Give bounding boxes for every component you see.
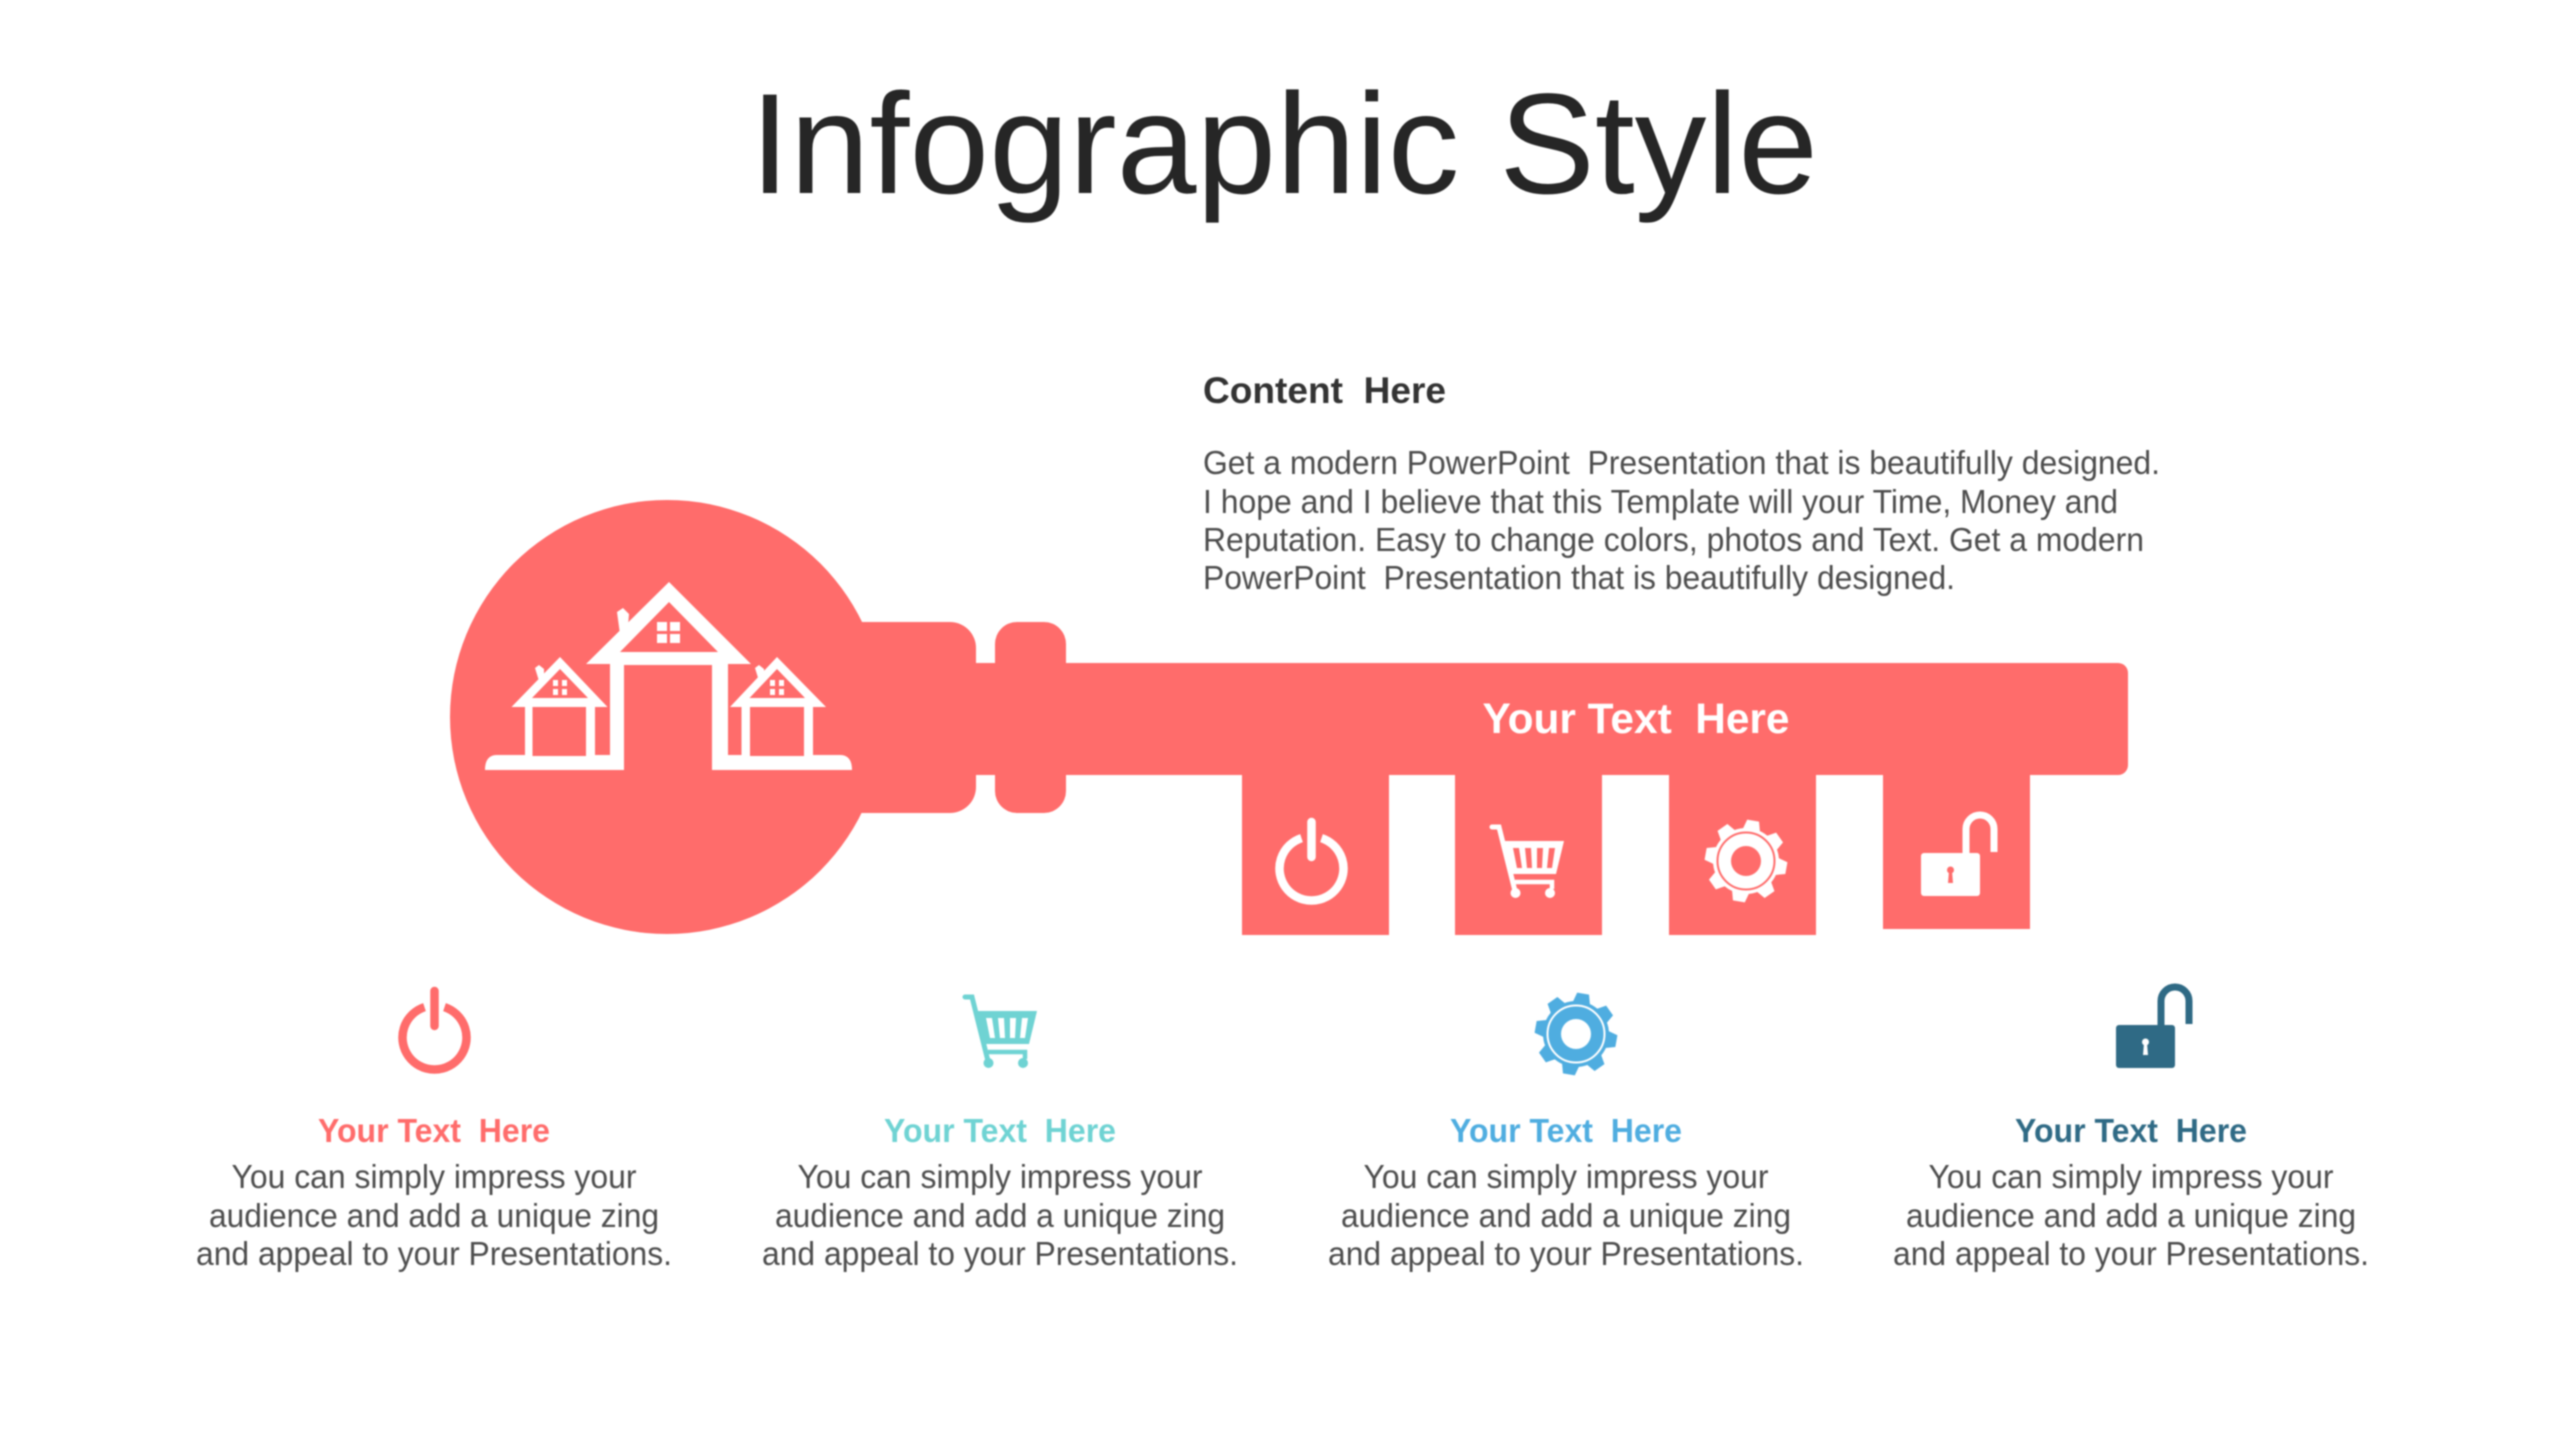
body text: You can simply impress your — [232, 1158, 636, 1195]
content paragraph — [1203, 444, 2160, 596]
key graphic — [450, 500, 2128, 935]
body text: audience and add a unique zing — [209, 1197, 659, 1234]
body text: and appeal to your Presentations. — [1328, 1235, 1804, 1272]
heading: Your Text Here — [884, 1112, 1116, 1149]
icon: gear — [1534, 992, 1618, 1076]
icon: cart on key — [1492, 827, 1564, 898]
heading: Your Text Here — [1450, 1112, 1682, 1149]
body text — [196, 1158, 672, 1272]
body text: You can simply impress your — [1928, 1158, 2334, 1195]
icon: cart — [965, 997, 1037, 1068]
body text — [1893, 1158, 2369, 1272]
body text: and appeal to your Presentations. — [762, 1235, 1238, 1272]
text block: content — [1203, 370, 2160, 596]
body text: audience and add a unique zing — [1906, 1197, 2356, 1234]
body text: You can simply impress your — [1364, 1158, 1768, 1195]
icon: gear on key — [1704, 819, 1788, 903]
icon: power — [402, 991, 466, 1069]
content heading: Content Here — [1203, 370, 1446, 411]
body text: and appeal to your Presentations. — [1893, 1235, 2369, 1272]
icon: houses — [485, 582, 852, 770]
body text: audience and add a unique zing — [1341, 1197, 1791, 1234]
body text: audience and add a unique zing — [775, 1197, 1225, 1234]
content paragraph: PowerPoint Presentation that is beautifully designed. — [1203, 559, 1955, 596]
key label: Your Text Here — [1482, 695, 1790, 743]
column: cart — [762, 997, 1238, 1272]
body text: You can simply impress your — [798, 1158, 1202, 1195]
key silhouette — [450, 500, 2128, 935]
icon: padlock — [2116, 987, 2189, 1068]
column: gear — [1328, 992, 1804, 1272]
column: padlock — [1893, 987, 2369, 1272]
body text: and appeal to your Presentations. — [196, 1235, 672, 1272]
body text — [1328, 1158, 1804, 1272]
heading: Your Text Here — [2015, 1112, 2247, 1149]
title: Infographic Style — [750, 65, 1818, 224]
column: power — [196, 991, 672, 1272]
content paragraph: Reputation. Easy to change colors, photos and Text. Get a modern — [1203, 521, 2144, 558]
heading: Your Text Here — [318, 1112, 550, 1149]
content paragraph: I hope and I believe that this Template will your Time, Money and — [1203, 483, 2118, 520]
body text — [762, 1158, 1238, 1272]
icon: power on key — [1280, 822, 1344, 900]
content paragraph: Get a modern PowerPoint Presentation that is beautifully designed. — [1203, 444, 2160, 481]
icon: padlock on key — [1921, 815, 1994, 896]
